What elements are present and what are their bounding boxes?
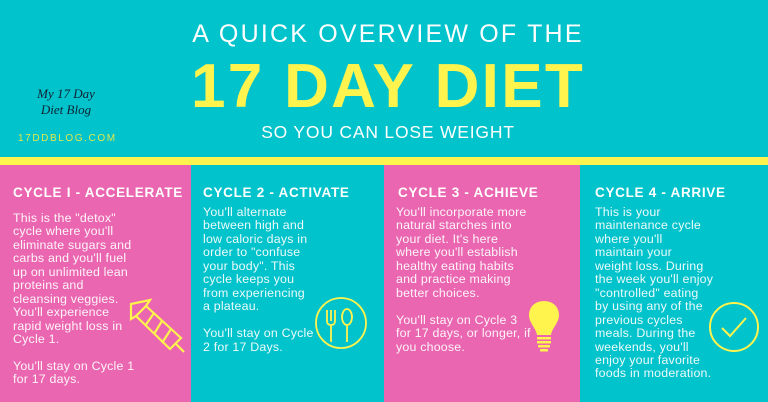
- body cycle 2: a plateau.: [203, 299, 259, 313]
- body cycle 1: up on unlimited lean: [13, 265, 128, 279]
- icon: check circle: [709, 302, 759, 352]
- body cycle 4: the week you'll enjoy: [595, 272, 713, 286]
- body cycle 2: low caloric days in: [203, 232, 307, 246]
- body cycle 4: by using any of the: [595, 299, 703, 313]
- main title: 17 DAY DIET: [191, 52, 585, 121]
- body cycle 2: You'll alternate: [203, 205, 287, 219]
- heading cycle 4: CYCLE 4 - ARRIVE: [595, 185, 726, 200]
- body cycle 3: You'll incorporate more: [396, 205, 526, 219]
- body cycle 1: rapid weight loss in: [13, 319, 122, 333]
- body cycle 1: carbs and you'll fuel: [13, 251, 126, 265]
- body cycle 1: proteins and: [13, 278, 84, 292]
- body cycle 3: better choices.: [396, 286, 480, 300]
- body cycle 1: [13, 211, 134, 386]
- body cycle 1: cleansing veggies.: [13, 292, 119, 306]
- body cycle 1: Cycle 1.: [13, 332, 59, 346]
- heading cycle 2: CYCLE 2 - ACTIVATE: [203, 185, 350, 200]
- subtitle: SO YOU CAN LOSE WEIGHT: [261, 122, 515, 142]
- body cycle 4: meals. During the: [595, 326, 696, 340]
- body cycle 4: weekends, you'll: [595, 340, 689, 354]
- panel: cycle 1: [0, 165, 191, 402]
- icon: lightbulb: [529, 301, 559, 352]
- body cycle 3: for 17 days, or longer, if: [396, 326, 531, 340]
- body cycle 4: maintenance cycle: [595, 218, 701, 232]
- yellow divider: [0, 157, 768, 165]
- body cycle 4: enjoy your favorite: [595, 353, 700, 367]
- body cycle 1: eliminate sugars and: [13, 238, 131, 252]
- body cycle 2: from experiencing: [203, 286, 305, 300]
- body cycle 2: You'll stay on Cycle: [203, 326, 314, 340]
- body cycle 3: You'll stay on Cycle 3: [396, 313, 517, 327]
- body cycle 3: [396, 205, 531, 354]
- body cycle 2: 2 for 17 Days.: [203, 340, 283, 354]
- body cycle 4: foods in moderation.: [595, 366, 711, 380]
- icon: rocket: [130, 298, 185, 353]
- body cycle 4: where you'll: [595, 232, 662, 246]
- body cycle 4: maintain your: [595, 245, 672, 259]
- body cycle 4: This is your: [595, 205, 661, 219]
- panel: cycle 3: [384, 165, 580, 402]
- body cycle 1: cycle where you'll: [13, 224, 113, 238]
- body cycle 1: for 17 days.: [13, 372, 80, 386]
- body cycle 2: [203, 205, 314, 354]
- body cycle 4: [595, 205, 713, 380]
- body cycle 2: order to "confuse: [203, 245, 300, 259]
- body cycle 3: where you'll establish: [396, 245, 518, 259]
- body cycle 2: between high and: [203, 218, 304, 232]
- icon: fork and spoon: [315, 297, 367, 349]
- logo: Diet Blog: [41, 102, 91, 117]
- body cycle 3: and practice making: [396, 272, 511, 286]
- body cycle 4: weight loss. During: [595, 259, 703, 273]
- website: 17DDBLOG.COM: [18, 133, 117, 144]
- title line 1: A QUICK OVERVIEW OF THE: [192, 20, 584, 48]
- body cycle 1: You'll experience: [13, 305, 109, 319]
- panel: cycle 2: [191, 165, 384, 402]
- body cycle 3: you choose.: [396, 340, 465, 354]
- body cycle 3: your diet. It's here: [396, 232, 498, 246]
- body cycle 1: You'll stay on Cycle 1: [13, 359, 134, 373]
- heading cycle 3: CYCLE 3 - ACHIEVE: [398, 185, 538, 200]
- body cycle 1: This is the "detox": [13, 211, 116, 225]
- panel: cycle 4: [580, 165, 768, 402]
- body cycle 2: cycle keeps you: [203, 272, 294, 286]
- body cycle 4: "controlled" eating: [595, 286, 699, 300]
- body cycle 4: previous cycles: [595, 313, 683, 327]
- body cycle 3: natural starches into: [396, 218, 512, 232]
- body cycle 3: healthy eating habits: [396, 259, 514, 273]
- body cycle 2: your body". This: [203, 259, 295, 273]
- logo: My 17 Day: [37, 86, 95, 101]
- logo: [37, 86, 95, 117]
- heading cycle 1: CYCLE I - ACCELERATE: [13, 185, 183, 200]
